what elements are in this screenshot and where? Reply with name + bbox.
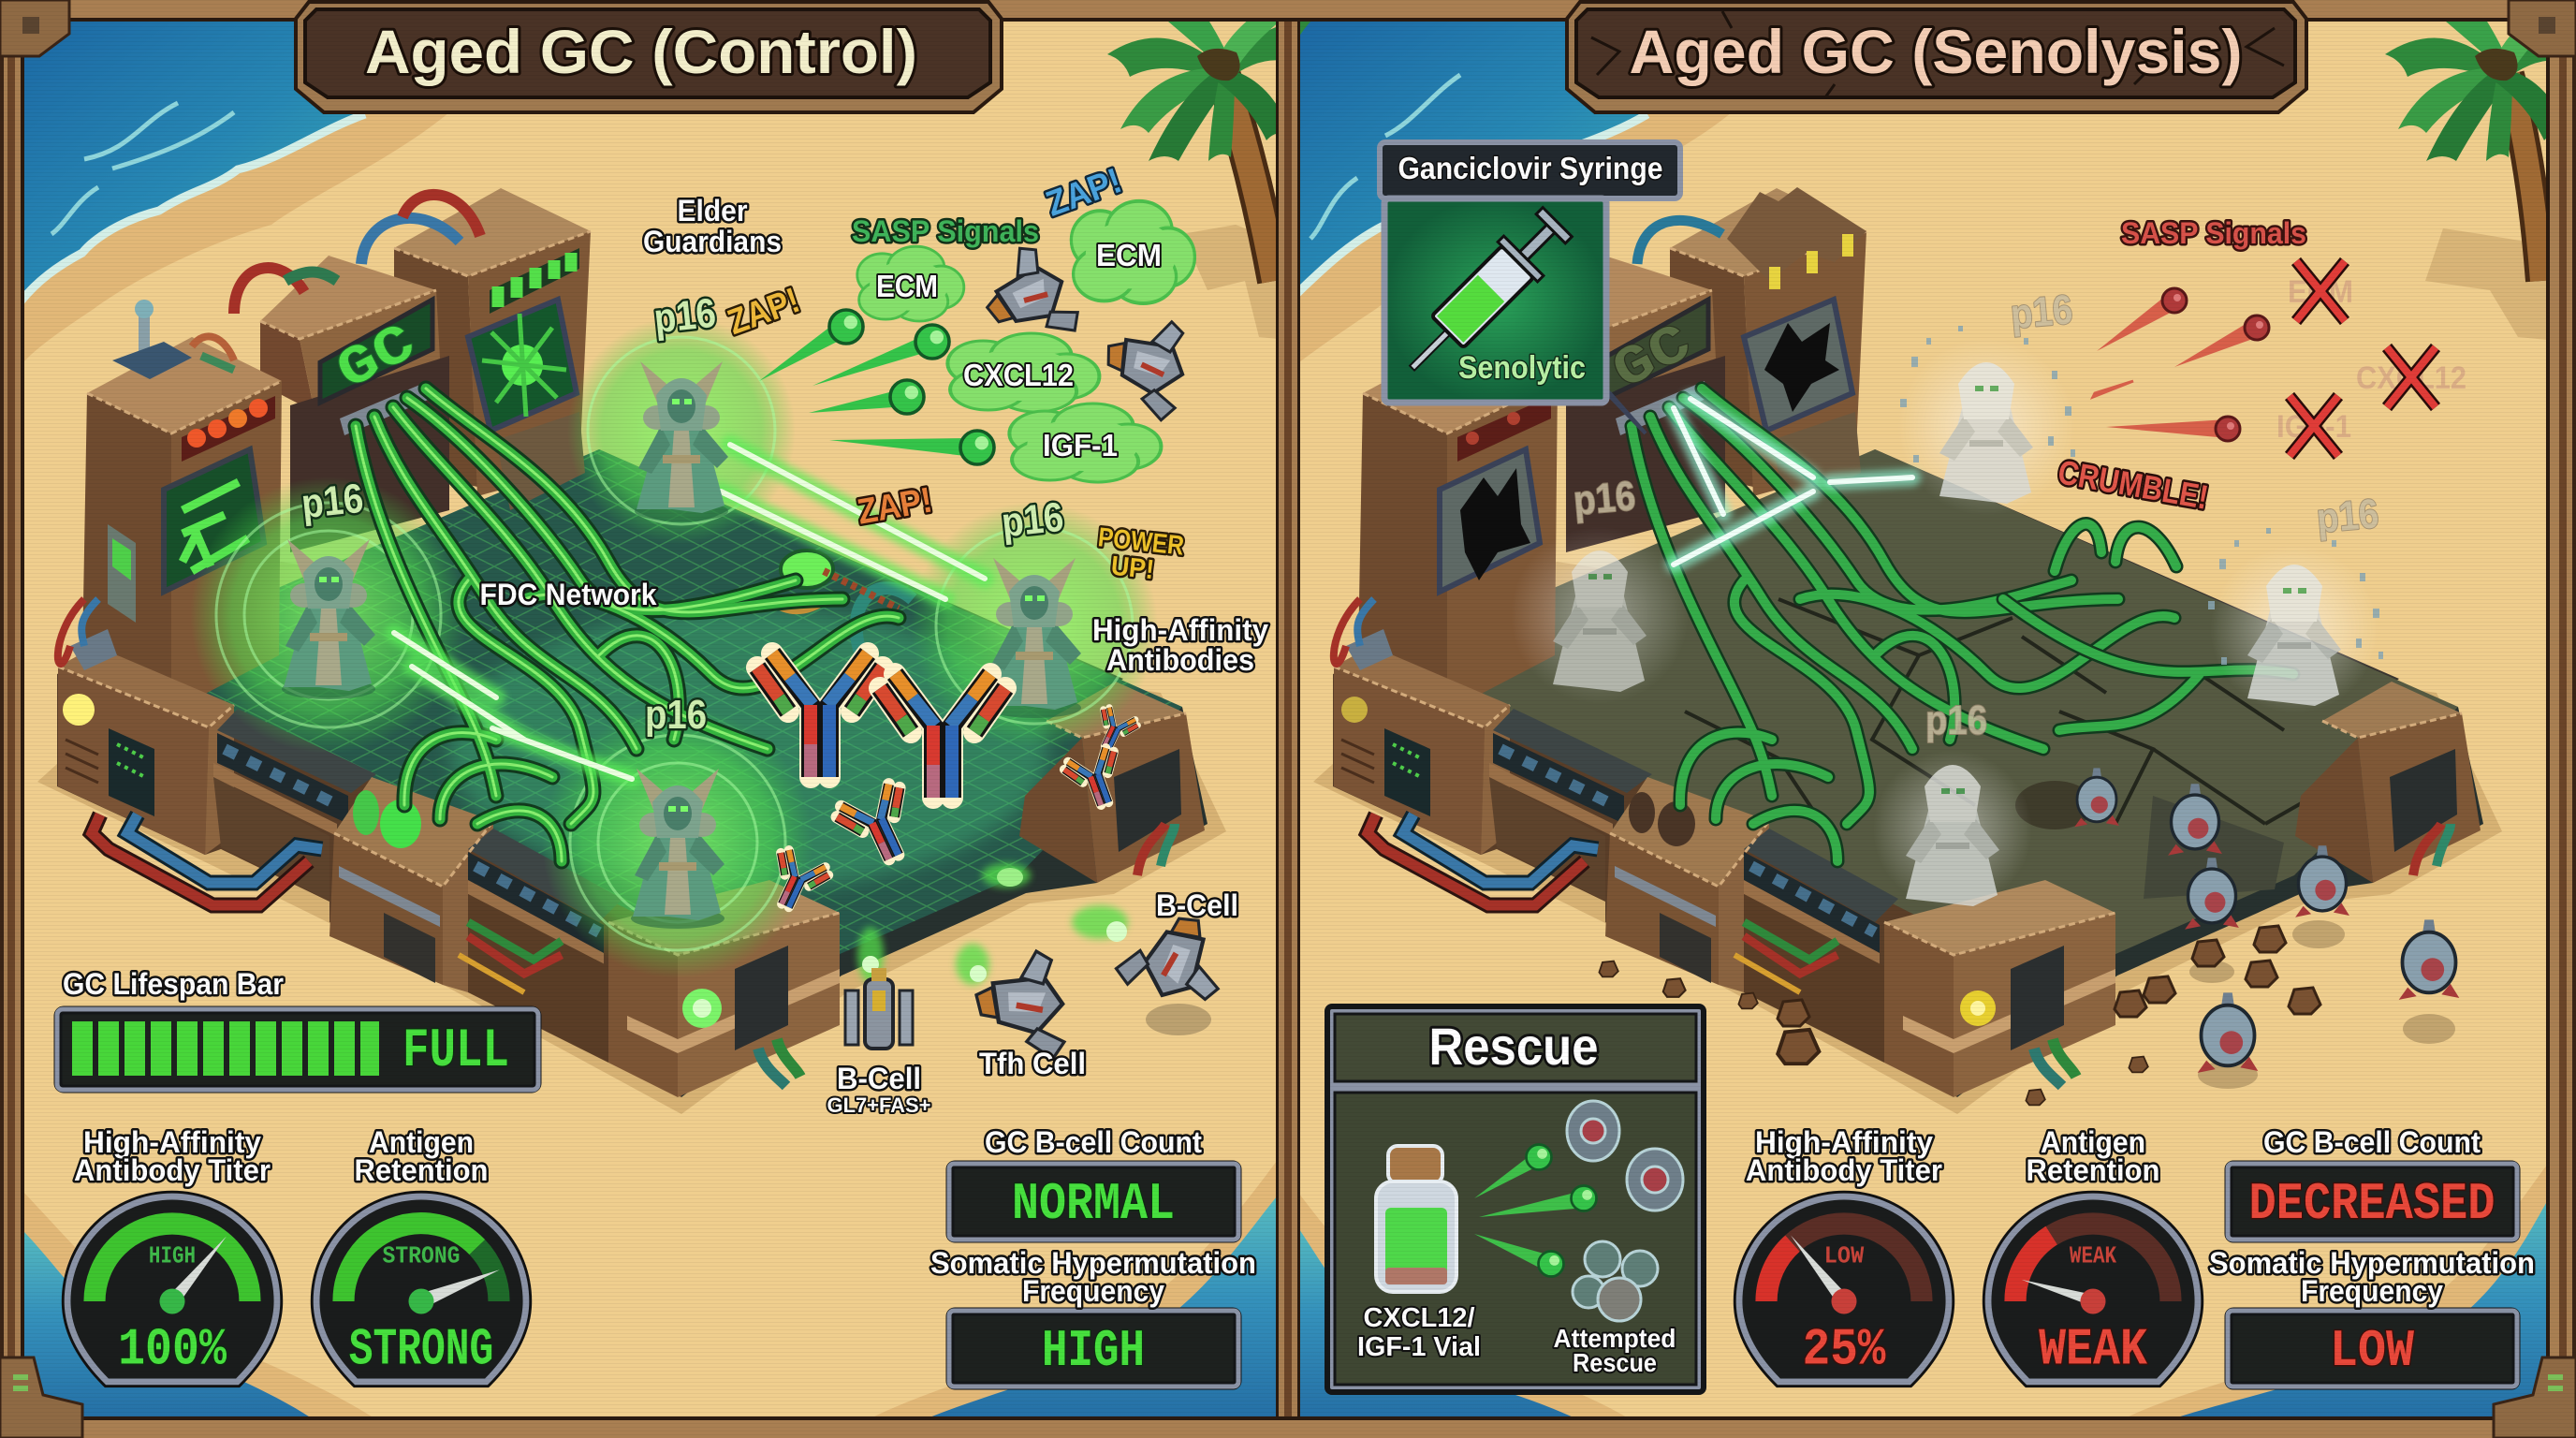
floor glowing circuit <box>122 449 1182 955</box>
gauge: antibody titer senolysis <box>1739 1125 1949 1382</box>
labels: control: p16 <box>300 476 365 527</box>
GC lifespan bar: FULL <box>402 1021 509 1082</box>
corner: bottom left <box>0 1357 82 1438</box>
SASP clouds and signals: CXCL12 <box>963 358 1074 392</box>
palm tree left <box>1107 11 1311 281</box>
labels: senolysis: p16 <box>1925 697 1987 743</box>
water: right panel bottom left <box>1295 1224 1575 1418</box>
readout: somatic hypermutation senolysis: Somatic Hypermutation <box>2209 1246 2535 1280</box>
SASP signals blocked: CXCL12 <box>2356 360 2466 396</box>
button machine lights <box>353 790 722 1028</box>
ship: Tfh <box>968 943 1079 1060</box>
SASP signals blocked: IGF-1 <box>2276 409 2351 445</box>
gauge: antibody titer control: 100% <box>118 1320 227 1380</box>
aura: guardians <box>190 316 1158 978</box>
central core unit <box>768 550 913 655</box>
cable on top <box>1637 220 1722 264</box>
labels: control: GL7+FAS+ <box>827 1093 930 1117</box>
dim GC screen <box>1596 300 1708 404</box>
dim GC screen: GC <box>1603 314 1702 404</box>
SASP clouds and signals <box>759 201 1194 482</box>
readout: GC B-cell count senolysis: DECREASED <box>2248 1174 2496 1234</box>
labels: control: Tfh Cell <box>979 1047 1086 1080</box>
gauge: antigen retention senolysis: Retention <box>2026 1153 2160 1187</box>
panel: rescue: IGF-1 Vial <box>1357 1332 1481 1362</box>
SASP signals blocked: SASP Signals <box>2121 216 2306 250</box>
screen: GC <box>320 300 432 404</box>
screen: burst cabinet <box>468 248 579 431</box>
title plaque: control <box>296 2 1002 112</box>
labels: control: ZAP! <box>1041 161 1127 225</box>
antibody: large right <box>880 674 1005 798</box>
labels: control: p16 <box>651 290 718 342</box>
labels: control: p16 <box>645 692 707 738</box>
gauge: antigen retention senolysis: WEAK <box>2070 1242 2116 1270</box>
icon: attempted rescue cells <box>1567 1101 1683 1321</box>
antibody: small right upper <box>1090 706 1139 756</box>
broken screen: burst cabinet <box>1744 300 1852 431</box>
labels: control: SASP Signals <box>852 214 1039 248</box>
water: left panel top <box>21 19 393 301</box>
gauge: antigen retention control <box>316 1125 526 1382</box>
antibody: small right lower <box>1062 746 1130 813</box>
gauge: antibody titer senolysis: Antibody Titer <box>1746 1153 1942 1187</box>
labels: control: Elder <box>678 194 747 227</box>
SASP clouds and signals: IGF-1 <box>1043 428 1118 462</box>
SASP signals blocked: ECM <box>2288 274 2353 310</box>
water: left panel bottom left <box>21 1228 312 1418</box>
gauge: antigen retention control: Retention <box>354 1153 489 1187</box>
readout: somatic hypermutation control <box>930 1246 1256 1387</box>
labels: senolysis: CRUMBLE! <box>2056 452 2211 517</box>
title plaque: senolysis <box>1567 2 2306 112</box>
labels: senolysis: p16 <box>2009 286 2074 338</box>
corner: top left <box>0 0 69 56</box>
labels: control: Antibodies <box>1106 643 1254 677</box>
water: right panel bottom right <box>2174 1196 2550 1418</box>
guardian: left <box>282 539 375 699</box>
gauge: antibody titer senolysis: LOW <box>1824 1242 1865 1270</box>
energy beams <box>394 445 985 779</box>
corner: top right <box>2509 0 2576 56</box>
labels: senolysis: p16 <box>2315 491 2380 542</box>
gauge: antibody titer senolysis: High-Affinity <box>1755 1125 1933 1159</box>
antibody: small center <box>834 781 925 872</box>
labels: control: UP! <box>1109 551 1155 585</box>
icon: vial <box>1376 1146 1456 1292</box>
guardian: right <box>988 558 1081 718</box>
panel: rescue: Rescue <box>1428 1017 1599 1076</box>
yellow lights <box>1769 234 1853 289</box>
gauge: antibody titer senolysis: 25% <box>1803 1320 1886 1380</box>
palm tree right <box>2385 11 2576 281</box>
dying B cells and debris <box>1599 768 2459 1105</box>
labels: control: ZAP! <box>855 480 935 533</box>
yellow lamp <box>1960 990 1996 1026</box>
palm shadow left <box>1182 225 1288 340</box>
panel: rescue <box>1327 1006 1704 1392</box>
vines: outer curls <box>2003 524 2293 730</box>
labels: control: ZAP! <box>723 281 805 343</box>
labels: control: FDC Network <box>479 578 657 611</box>
ghost guardian: left <box>1511 526 1689 704</box>
guardian: top <box>635 361 728 521</box>
labels: control: POWER <box>1096 522 1185 562</box>
labels: control: B-Cell <box>837 1062 921 1095</box>
gauge: antibody titer control <box>67 1125 277 1382</box>
water: right panel top <box>1295 19 1676 295</box>
palm shadow right <box>2425 228 2548 340</box>
gauge: antigen retention senolysis: Antigen <box>2041 1125 2145 1159</box>
gauge: antigen retention control: STRONG <box>383 1242 460 1270</box>
SASP signals blocked <box>2093 216 2466 456</box>
gauge: antibody titer control: HIGH <box>149 1242 196 1270</box>
callout: ganciclovir syringe: Senolytic <box>1458 350 1586 386</box>
panel: rescue: Attempted <box>1554 1324 1676 1353</box>
readout: somatic hypermutation control: Somatic Hypermutation <box>930 1246 1256 1280</box>
icon: syringe <box>1392 202 1577 388</box>
panel: control platform <box>37 188 1226 1114</box>
screen: GC: GC <box>328 314 426 404</box>
panel: senolysis platform <box>1313 187 2502 1114</box>
readout: GC B-cell count senolysis <box>2228 1125 2517 1240</box>
labels: control: p16 <box>1000 494 1065 546</box>
broken screen: left cabinet <box>1341 412 1540 723</box>
labels: control: Guardians <box>643 225 782 258</box>
readout: somatic hypermutation senolysis: LOW <box>2330 1321 2414 1381</box>
vines: FDC network <box>356 389 899 861</box>
readout: GC B-cell count control <box>949 1125 1238 1240</box>
labels: control: B-Cell <box>1156 888 1238 922</box>
ship: B-Cell right <box>1112 897 1242 1024</box>
labels: control <box>300 161 1268 1117</box>
screen: status cabinet <box>63 399 268 726</box>
gauge: antigen retention senolysis: WEAK <box>2039 1320 2147 1380</box>
readout: GC B-cell count senolysis: GC B-cell Count <box>2263 1125 2481 1159</box>
readout: GC B-cell count control: GC B-cell Count <box>985 1125 1202 1159</box>
icon: rescue shots <box>1474 1144 1597 1277</box>
ghost guardian: top <box>1897 326 2075 516</box>
panel: rescue: CXCL12/ <box>1363 1303 1475 1333</box>
readout: GC B-cell count control: NORMAL <box>1012 1174 1175 1234</box>
GC lifespan bar: GC Lifespan Bar <box>63 967 284 1001</box>
antibody: large left <box>757 653 883 777</box>
ghost guardian: front <box>1873 750 2032 909</box>
labels: senolysis <box>1572 286 2380 743</box>
labels: control: High-Affinity <box>1092 613 1268 647</box>
title plaque: senolysis: Aged GC (Senolysis) <box>1629 17 2243 86</box>
antibody: small left <box>761 847 831 917</box>
labels: senolysis: p16 <box>1572 473 1637 524</box>
broken machine roof <box>1727 187 1866 281</box>
cables on top of machines <box>234 195 480 314</box>
gauge: antigen retention senolysis <box>1988 1125 2198 1382</box>
floor cracked <box>1398 449 2458 955</box>
gauge: antibody titer control: High-Affinity <box>83 1125 261 1159</box>
SASP clouds and signals: ECM <box>876 269 938 303</box>
callout: ganciclovir syringe: Ganciclovir Syringe <box>1398 151 1662 185</box>
gauge: antibody titer control: Antibody Titer <box>74 1153 271 1187</box>
water: left panel bottom right <box>928 1196 1277 1418</box>
ship: SASP upper <box>974 238 1082 351</box>
GC lifespan bar <box>57 967 538 1090</box>
readout: somatic hypermutation control: Frequency <box>1022 1274 1164 1308</box>
dark button machine <box>1629 792 1695 846</box>
readout: somatic hypermutation control: HIGH <box>1042 1321 1145 1381</box>
callout: ganciclovir syringe <box>1380 142 1680 433</box>
readout: somatic hypermutation senolysis: Frequency <box>2301 1274 2443 1308</box>
gauge: antigen retention control: Antigen <box>369 1125 474 1159</box>
SASP clouds and signals: ECM <box>1096 238 1162 272</box>
corner: bottom right <box>2494 1357 2576 1438</box>
panel: rescue: Rescue <box>1573 1348 1657 1377</box>
title plaque: control: Aged GC (Control) <box>365 17 917 86</box>
ship: B-Cell center <box>845 968 913 1049</box>
senolytic beams <box>1674 399 1912 565</box>
green shots <box>857 863 1128 985</box>
shadow under B-Cell <box>1146 1004 1211 1035</box>
readout: somatic hypermutation senolysis <box>2209 1246 2535 1387</box>
gauge: antigen retention control: STRONG <box>349 1320 493 1380</box>
guardian: front <box>631 769 724 929</box>
ship: SASP lower <box>1090 302 1208 423</box>
ghost guardian: right <box>2208 528 2383 713</box>
vines: decayed network <box>1632 389 2174 861</box>
